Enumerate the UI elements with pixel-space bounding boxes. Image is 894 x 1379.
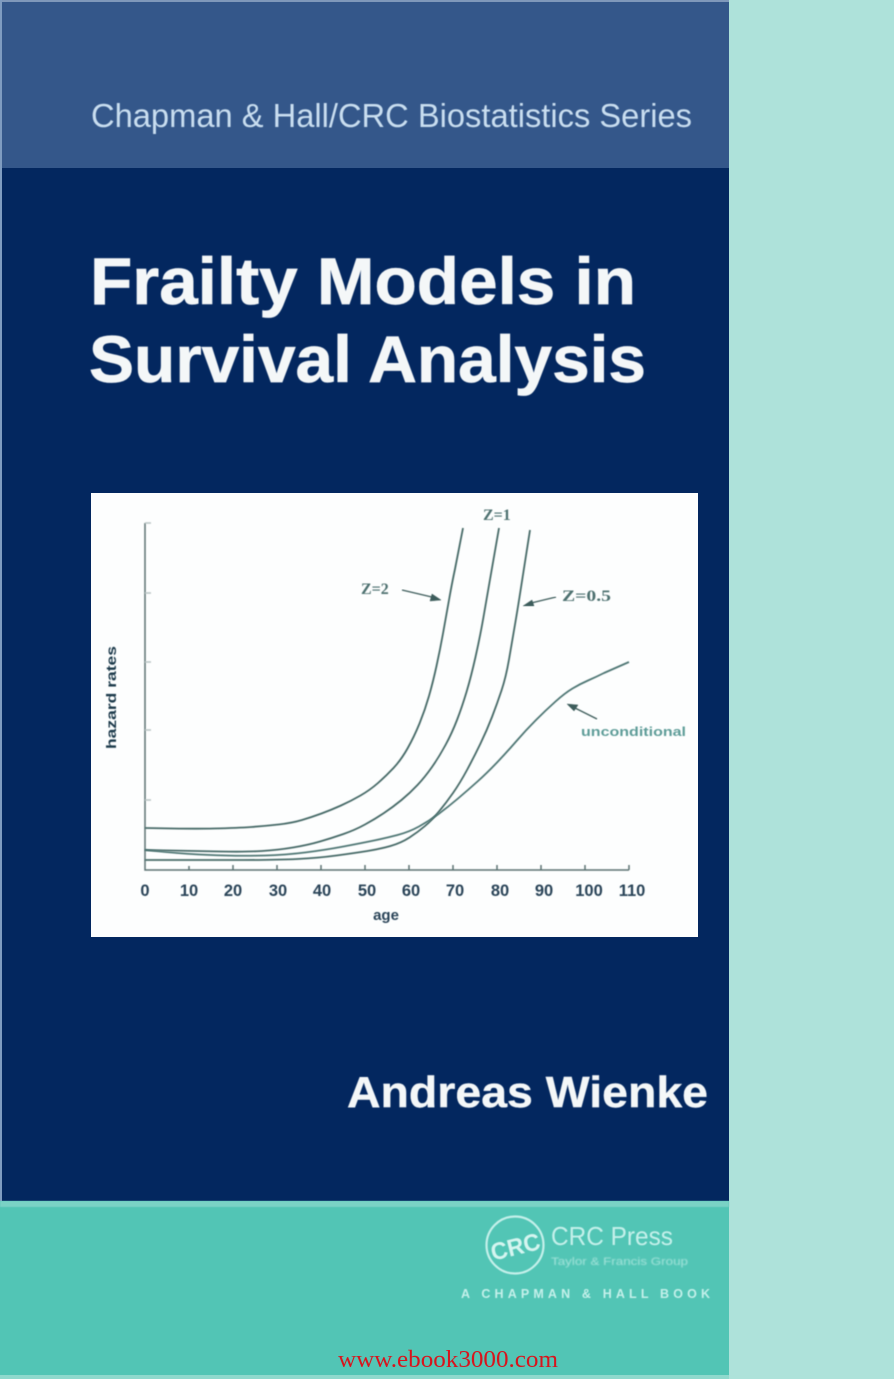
x-axis tick labels <box>140 882 645 900</box>
author name: Andreas Wienke <box>347 1068 708 1117</box>
chart: hazard rates by age <box>91 493 698 937</box>
panel: publisher band <box>0 1201 729 1379</box>
x-axis tick labels: 10 <box>180 882 198 900</box>
x-axis tick labels: 80 <box>491 882 509 900</box>
arrow: Z=0.5 <box>523 597 556 606</box>
panel: series banner <box>0 0 729 168</box>
icon: CRC logo: CRC <box>488 1228 543 1267</box>
label: Z=0.5: Z=0.5 <box>562 588 611 605</box>
x-axis tick labels: 20 <box>224 882 242 900</box>
series title: Chapman & Hall/CRC Biostatistics Series <box>91 97 692 134</box>
publisher name: CRC Press <box>551 1221 673 1251</box>
publisher group: Taylor & Francis Group <box>551 1256 688 1268</box>
x-axis tick labels: 30 <box>269 882 287 900</box>
x-axis tick labels: 0 <box>140 882 150 900</box>
panel: right spine <box>729 0 894 1379</box>
book title: Frailty Models in <box>90 244 636 318</box>
label: unconditional: unconditional <box>581 724 686 739</box>
book title: Survival Analysis <box>89 322 646 396</box>
watermark URL: www.ebook3000.com <box>338 1346 558 1373</box>
arrow: Z=2 <box>402 590 441 601</box>
icon: CRC logo <box>486 1216 544 1274</box>
curve: unconditional <box>145 662 629 856</box>
label: Z=2: Z=2 <box>361 581 389 598</box>
chart background <box>91 493 698 937</box>
axes <box>145 523 629 870</box>
x-axis tick labels: 50 <box>358 882 376 900</box>
left edge highlight <box>0 0 2 1379</box>
x-axis tick labels: 70 <box>446 882 464 900</box>
x-axis tick labels: 100 <box>575 882 603 900</box>
y-axis label: hazard rates <box>103 646 119 749</box>
label: Z=1: Z=1 <box>483 507 511 524</box>
arrow: unconditional <box>567 704 597 719</box>
imprint line: A CHAPMAN & HALL BOOK <box>461 1287 710 1301</box>
curve: Z=0.5 <box>145 530 530 860</box>
x-axis tick labels: 40 <box>313 882 331 900</box>
book title <box>89 244 646 396</box>
x-axis tick labels: 110 <box>619 882 645 900</box>
curve: Z=2 <box>145 528 463 829</box>
x-axis tick labels: 90 <box>535 882 553 900</box>
curve: Z=1 <box>145 528 499 852</box>
x-axis label: age <box>373 907 399 924</box>
x-axis tick labels: 60 <box>402 882 420 900</box>
